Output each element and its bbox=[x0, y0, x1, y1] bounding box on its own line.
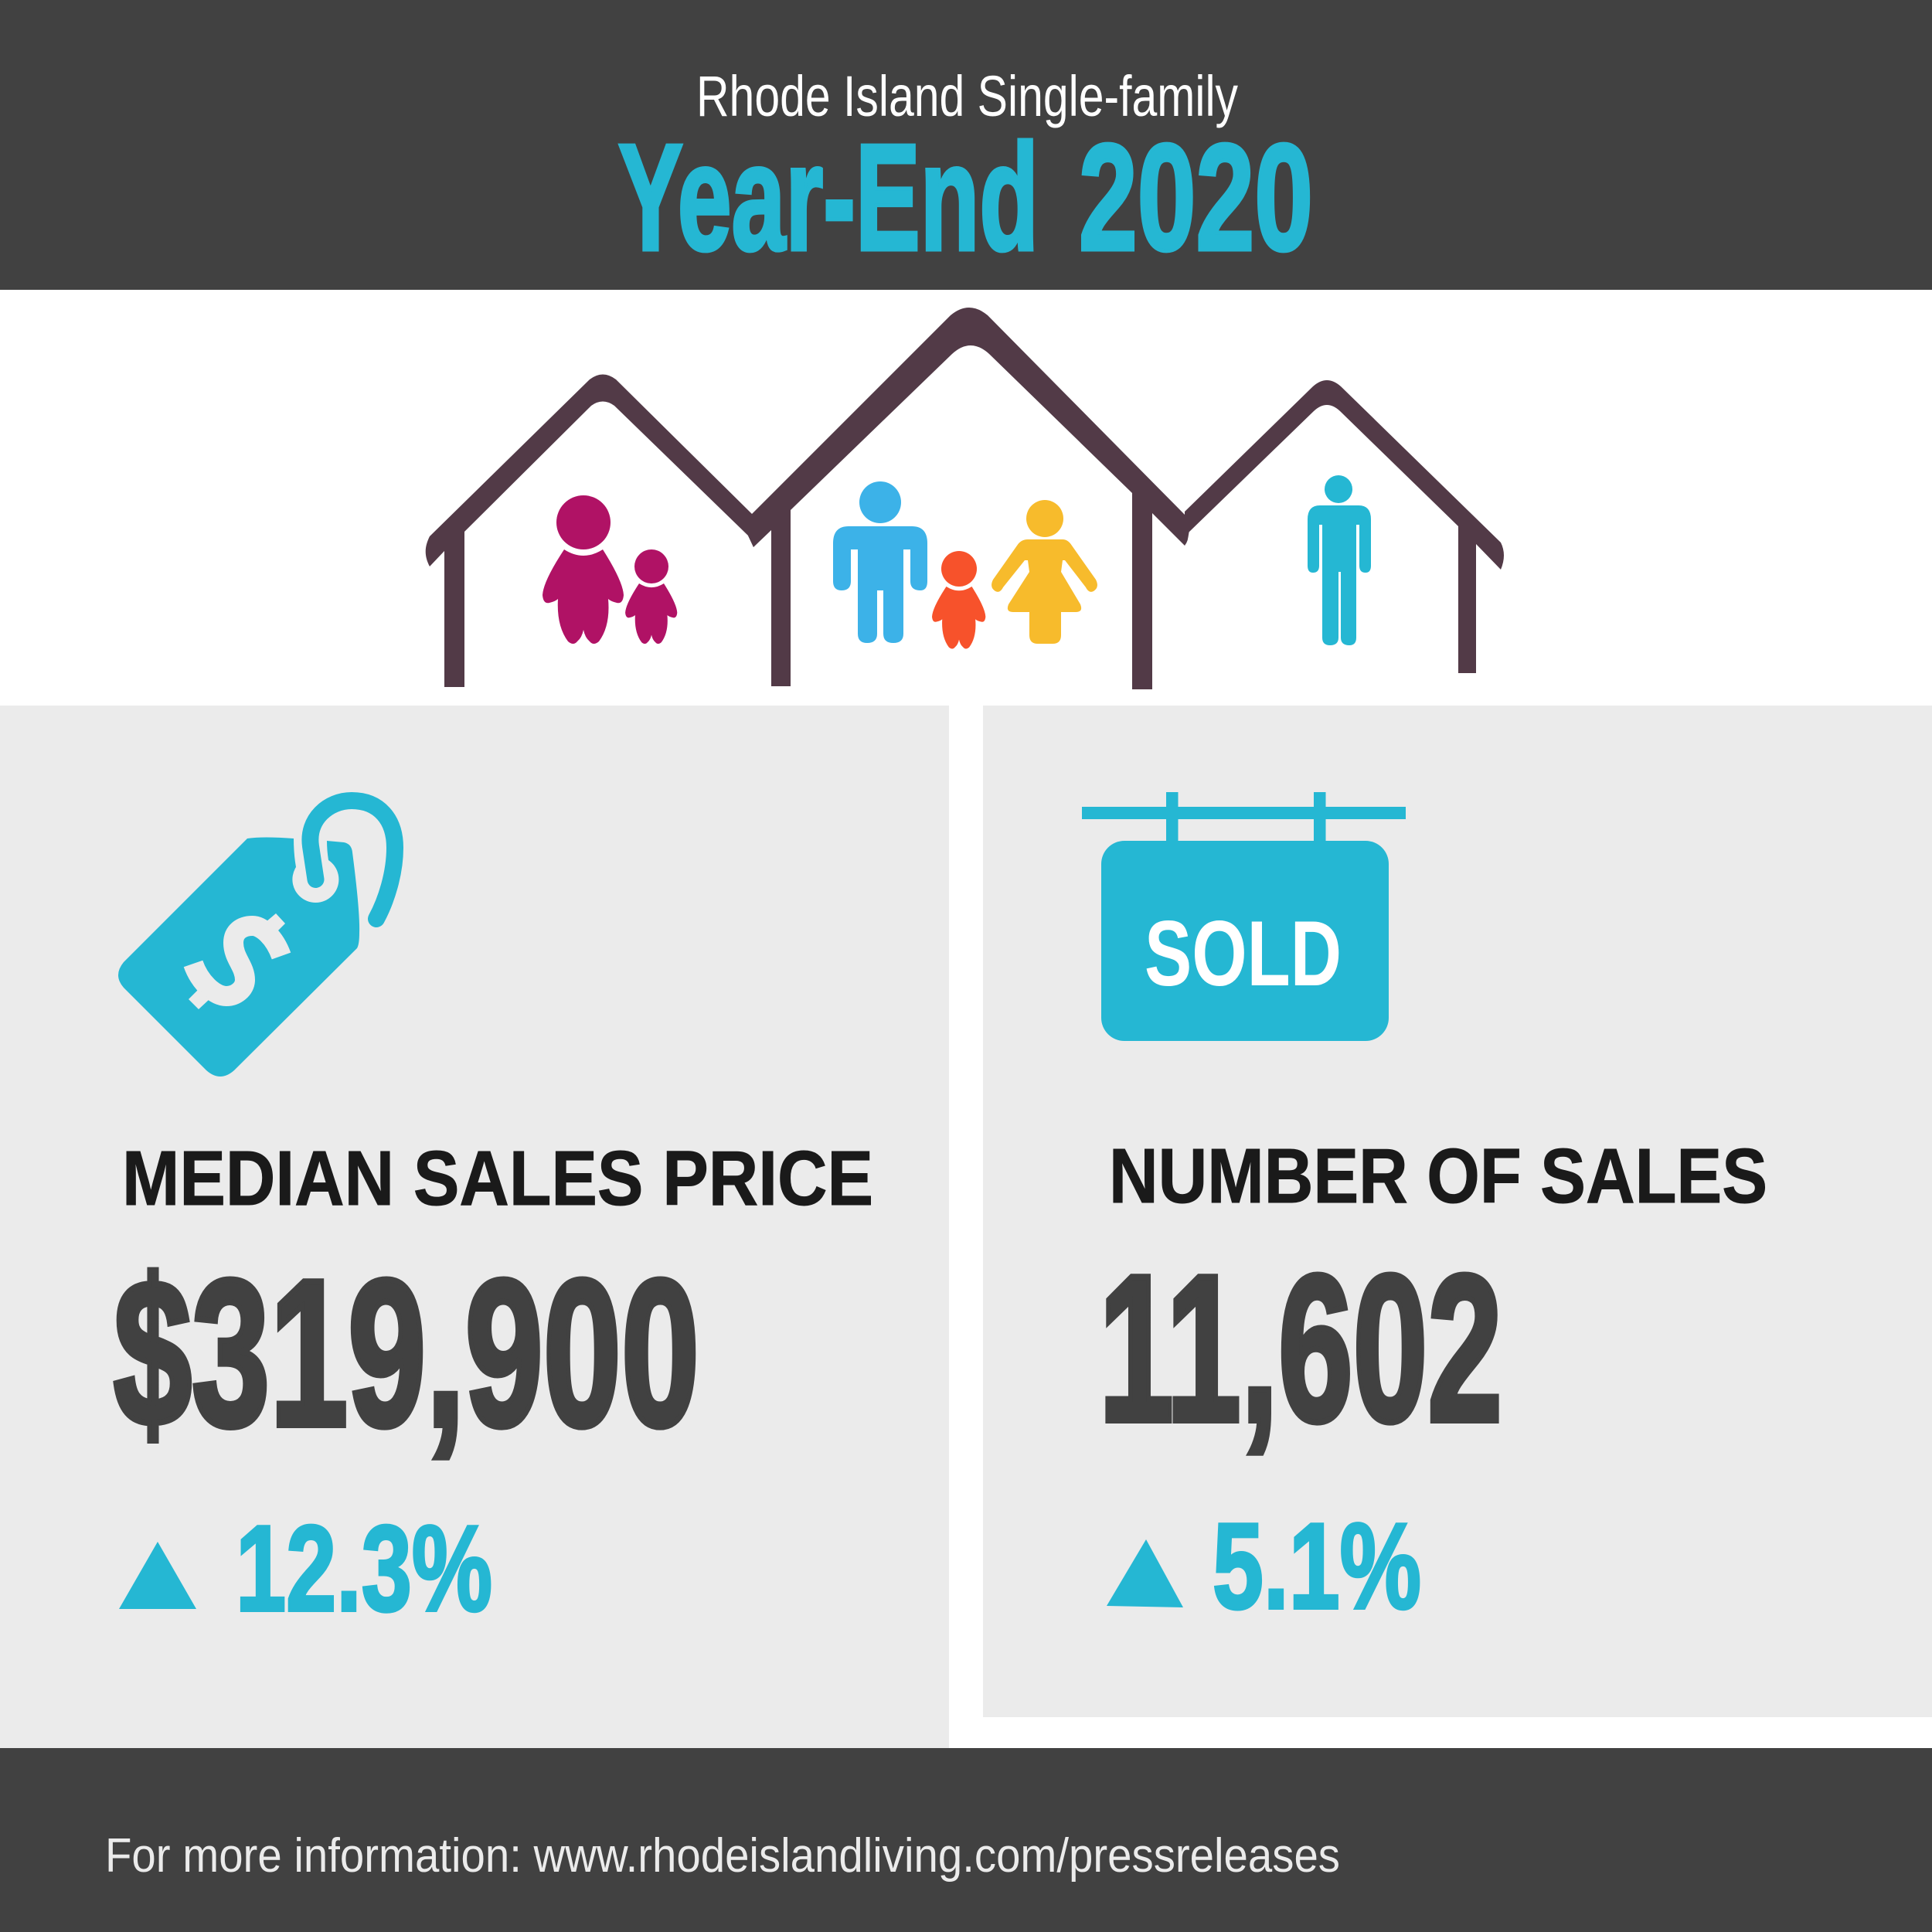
title: 2020 bbox=[1079, 113, 1313, 282]
icon: center house bbox=[748, 308, 1190, 689]
icon: up arrow bbox=[1107, 1539, 1183, 1607]
houses with families bbox=[426, 308, 1504, 689]
header band bbox=[0, 0, 1932, 290]
subtitle: Rhode Island Single-family bbox=[696, 64, 1238, 128]
heading: median sales price: MEDIAN SALES PRICE bbox=[122, 1135, 873, 1222]
icon: blue man bbox=[833, 481, 927, 643]
panel: number of sales bbox=[983, 706, 1932, 1717]
icon: right house bbox=[1185, 380, 1504, 673]
icon: magenta child bbox=[625, 549, 677, 644]
footer band bbox=[0, 1748, 1932, 1932]
title: Year-End bbox=[618, 113, 1039, 282]
value: median price: $319,900 bbox=[114, 1237, 699, 1470]
icon: orange child bbox=[932, 551, 985, 649]
icon: up arrow bbox=[119, 1542, 196, 1609]
heading: number of sales: NUMBER OF SALES bbox=[1109, 1133, 1767, 1219]
value: number of sales: 11,602 bbox=[1099, 1233, 1502, 1465]
footer text: For more information: www.rhodeislandliving.com/pressreleases bbox=[105, 1829, 1340, 1883]
icon: magenta adult bbox=[543, 495, 624, 644]
icon: sold sign: SOLD bbox=[1145, 902, 1342, 1005]
change: number of sales: 5.1% bbox=[1213, 1498, 1421, 1634]
icon: price tag bbox=[118, 801, 395, 1077]
panel: median sales price bbox=[0, 706, 949, 1748]
icon: left house bbox=[426, 374, 757, 687]
icon: sold sign bbox=[1082, 792, 1406, 1041]
icon: teal man bbox=[1308, 475, 1371, 645]
icon: yellow woman bbox=[992, 500, 1097, 644]
change: median price: 12.3% bbox=[236, 1501, 492, 1637]
